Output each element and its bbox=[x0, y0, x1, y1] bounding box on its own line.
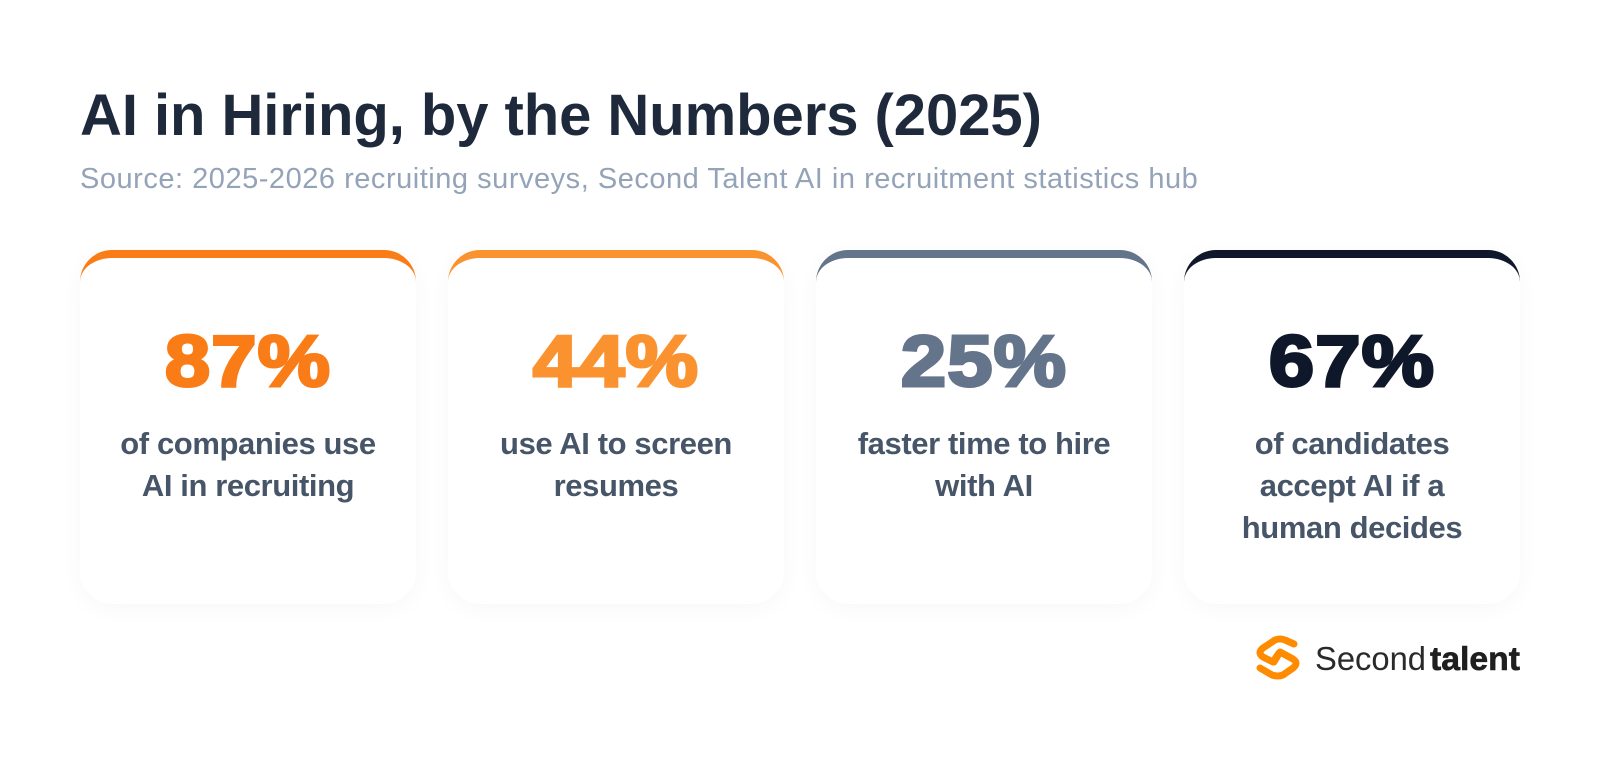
wordmark: talent: talent bbox=[1430, 640, 1520, 677]
label: candidate acceptance bbox=[1242, 426, 1462, 545]
label: candidate acceptance: of candidates bbox=[1255, 426, 1449, 461]
label: time to hire: faster time to hire bbox=[858, 426, 1110, 461]
stat: 44%: 44% bbox=[533, 322, 699, 402]
wordmark: Second: Second bbox=[1315, 640, 1426, 677]
stat: 25%: 25% bbox=[901, 322, 1067, 402]
label: time to hire bbox=[858, 426, 1110, 503]
title: AI in Hiring, by the Numbers (2025) bbox=[80, 83, 1042, 148]
label: resume screening bbox=[500, 426, 732, 503]
panel: 25% stat card bbox=[816, 250, 1152, 604]
panel: 67% stat card bbox=[1184, 250, 1520, 604]
stat: 67%: 67% bbox=[1269, 322, 1435, 402]
label: resume screening: use AI to screen bbox=[500, 426, 732, 461]
label: companies using AI: of companies use bbox=[120, 426, 376, 461]
stat: 87%: 87% bbox=[165, 322, 331, 402]
logo: Second Talent bbox=[1256, 636, 1520, 680]
label: candidate acceptance: accept AI if a bbox=[1260, 468, 1444, 503]
icon: logo mark bbox=[1260, 639, 1296, 676]
panel: 44% stat card bbox=[448, 250, 784, 604]
source line: Source: 2025-2026 recruiting surveys, Second Talent AI in recruitment statistics hub bbox=[80, 163, 1198, 195]
label: candidate acceptance: human decides bbox=[1242, 510, 1462, 545]
label: time to hire: with AI bbox=[935, 468, 1033, 503]
label: companies using AI: AI in recruiting bbox=[142, 468, 354, 503]
label: companies using AI bbox=[120, 426, 376, 503]
panel: 87% stat card bbox=[80, 250, 416, 604]
label: resume screening: resumes bbox=[554, 468, 678, 503]
